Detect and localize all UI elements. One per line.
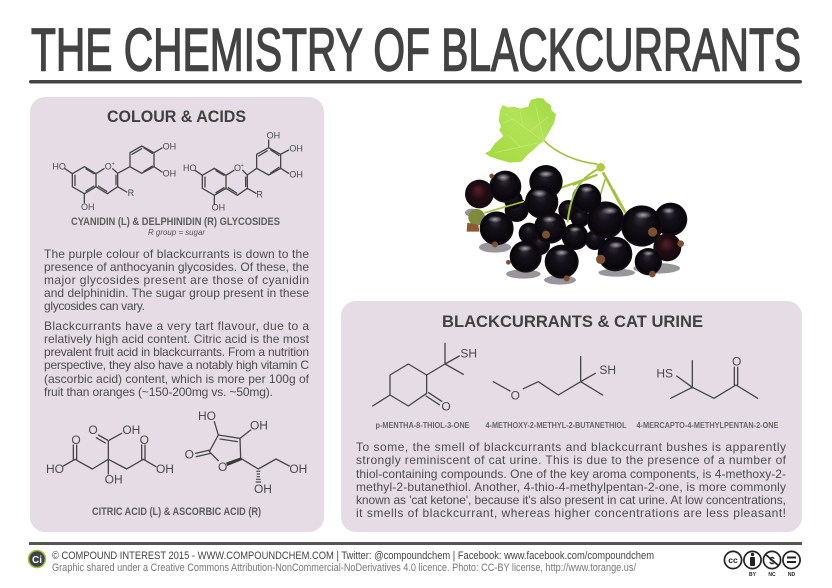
molecule: 4-methoxy-2-methyl-2-butanethiol: SH — [599, 363, 616, 377]
molecule: cyanidin: HO — [52, 161, 66, 171]
label: mercapto: 4-MERCAPTO-4-METHYLPENTAN-2-ONE — [636, 421, 779, 430]
text block: purple colour: and delphinidin. The sugar group present in these — [44, 286, 309, 300]
molecule: ascorbic acid: HO — [198, 409, 216, 423]
molecule: citric acid: OH — [156, 462, 174, 476]
green berry — [468, 209, 485, 226]
molecule: ascorbic acid — [185, 409, 307, 496]
molecule: delphinidin: OH — [212, 203, 225, 213]
molecule: cyanidin: O — [105, 161, 112, 171]
molecule: delphinidin: + — [241, 163, 244, 169]
highlights — [488, 171, 675, 256]
molecule: delphinidin: OH — [267, 131, 280, 141]
berry shadows — [465, 209, 680, 285]
footer credits: Graphic shared under a Creative Commons Attribution-NonCommercial-NoDerivatives 4.0 licence. Photo: CC-BY license, http://www.torange.us/ — [52, 562, 637, 574]
text block: purple colour: The purple colour of blackcurrants is down to the — [44, 247, 309, 261]
molecule: ascorbic acid: O — [185, 448, 194, 462]
text block: cat urine explanation: To some, the smell of blackcurrants and blackcurrant bushes is apparently — [356, 440, 786, 454]
icon: creative commons badges — [724, 551, 800, 578]
icon: compound interest logo: Ci — [32, 555, 42, 566]
text block: tart flavour: prevalent fruit acid in blackcurrants. From a nutrition — [44, 345, 309, 359]
molecule: cyanidin: OH — [81, 202, 94, 212]
molecule: cyanidin: OH — [163, 141, 176, 151]
icon: creative commons badges: cc — [728, 555, 738, 565]
front berries — [480, 171, 662, 279]
molecule: p-mentha-8-thiol-3-one: SH — [460, 346, 477, 360]
text block: tart flavour: fruit than oranges (~150-200mg vs. ~50mg). — [44, 385, 273, 399]
text block: cat urine explanation — [356, 440, 787, 520]
icon: creative commons badges: NC — [768, 572, 776, 578]
molecule: delphinidin — [183, 131, 303, 213]
footer credits — [52, 550, 654, 574]
molecule: cyanidin: + — [112, 161, 115, 167]
molecule: ascorbic acid: OH — [250, 418, 268, 432]
molecule: citric acid — [46, 423, 174, 486]
molecule: p-mentha-8-thiol-3-one: O — [441, 400, 451, 414]
stems over berries — [485, 168, 625, 222]
photo: blackcurrants — [465, 98, 687, 285]
molecule: ascorbic acid: OH — [289, 462, 307, 476]
text block: cat urine explanation: known as 'cat ketone', because it's also present in cat urine. At low concentrations, — [356, 493, 786, 507]
title rule — [29, 80, 802, 84]
text block: purple colour: glycosides can vary. — [44, 299, 145, 313]
molecule: delphinidin: O — [234, 163, 241, 173]
molecule: cyanidin — [52, 141, 176, 212]
molecule: citric acid: O — [88, 423, 98, 437]
molecule: delphinidin: R — [256, 189, 263, 199]
text block: tart flavour: perspective, they also have a notably high vitamin C — [44, 358, 309, 372]
molecule: ascorbic acid: OH — [254, 482, 272, 496]
text block: tart flavour: (ascorbic acid) content, which is more per 100g of — [44, 372, 310, 386]
icon: creative commons badges: ND — [788, 572, 795, 578]
text block: tart flavour: relatively high acid content. Citric acid is the most — [44, 332, 310, 346]
molecule: citric acid: O — [71, 433, 81, 447]
caption: glycosides: CYANIDIN (L) & DELPHINIDIN (R) GLYCOSIDES — [71, 216, 280, 228]
molecule: citric acid: HO — [46, 462, 64, 476]
molecule: p-mentha-8-thiol-3-one — [373, 343, 477, 414]
heading: cat urine: BLACKCURRANTS & CAT URINE — [442, 313, 703, 331]
text block: purple colour — [44, 247, 309, 313]
text block: tart flavour: Blackcurrants have a very tart flavour, due to a — [44, 319, 309, 333]
molecule: delphinidin: OH — [289, 169, 303, 179]
icon: creative commons badges: BY — [749, 572, 757, 578]
text block: purple colour: presence of anthocyanin glycosides. Of these, the — [44, 260, 309, 274]
molecule: cyanidin: R — [128, 188, 135, 198]
back berries — [504, 165, 687, 255]
molecule: cyanidin: OH — [163, 168, 176, 178]
molecule: citric acid: OH — [105, 472, 123, 486]
icon: creative commons badges: $ — [769, 555, 775, 567]
molecule: 4-mercapto-4-methylpentan-2-one: HS — [656, 367, 673, 381]
icon: compound interest logo — [28, 550, 46, 568]
molecule: citric acid: OH — [122, 423, 140, 437]
text block: cat urine explanation: strongly reminiscent of cat urine. This is due to the presence of a number of — [356, 453, 787, 467]
molecule: 4-mercapto-4-methylpentan-2-one — [656, 354, 758, 398]
molecule: citric acid: O — [140, 433, 149, 447]
text block: cat urine explanation: thiol-containing compounds. One of the key aroma components, is 4-methoxy-2- — [356, 467, 786, 481]
text block: tart flavour — [44, 319, 310, 399]
molecule: delphinidin: OH — [289, 144, 303, 154]
text block: purple colour: major glycosides present are those of cyanidin — [44, 273, 309, 287]
heading: colour and acids: COLOUR & ACIDS — [107, 108, 246, 126]
molecule: 4-methoxy-2-methyl-2-butanethiol — [493, 357, 616, 403]
footer credits: © COMPOUND INTEREST 2015 - WWW.COMPOUNDCHEM.COM | Twitter: @compoundchem | Facebook: www.facebook.com/compoundchem — [52, 550, 654, 562]
text block: cat urine explanation: methyl-2-butanethiol. Another, 4-thio-4-methylpentan-2-one, is more commonly — [356, 480, 786, 494]
text block: cat urine explanation: it smells of blackcurrant, whereas higher concentrations are less pleasant! — [356, 506, 786, 520]
label: methoxy: 4-METHOXY-2-METHYL-2-BUTANETHIOL — [486, 421, 627, 430]
calyx details — [489, 174, 684, 281]
leaf — [485, 98, 556, 163]
caption: acids: CITRIC ACID (L) & ASCORBIC ACID (R) — [92, 506, 261, 518]
molecule: 4-mercapto-4-methylpentan-2-one: O — [732, 354, 741, 368]
label: p-mentha: p-MENTHA-8-THIOL-3-ONE — [376, 421, 470, 430]
molecule: 4-methoxy-2-methyl-2-butanethiol: O — [511, 389, 520, 403]
molecule: delphinidin: HO — [183, 163, 196, 173]
panel: colour and acids — [30, 97, 324, 532]
note: r group: R group = sugar — [148, 228, 205, 237]
footer rule — [29, 542, 802, 545]
molecule: ascorbic acid: O — [218, 460, 227, 474]
panel: blackcurrants and cat urine — [341, 301, 802, 532]
stems — [544, 141, 625, 212]
